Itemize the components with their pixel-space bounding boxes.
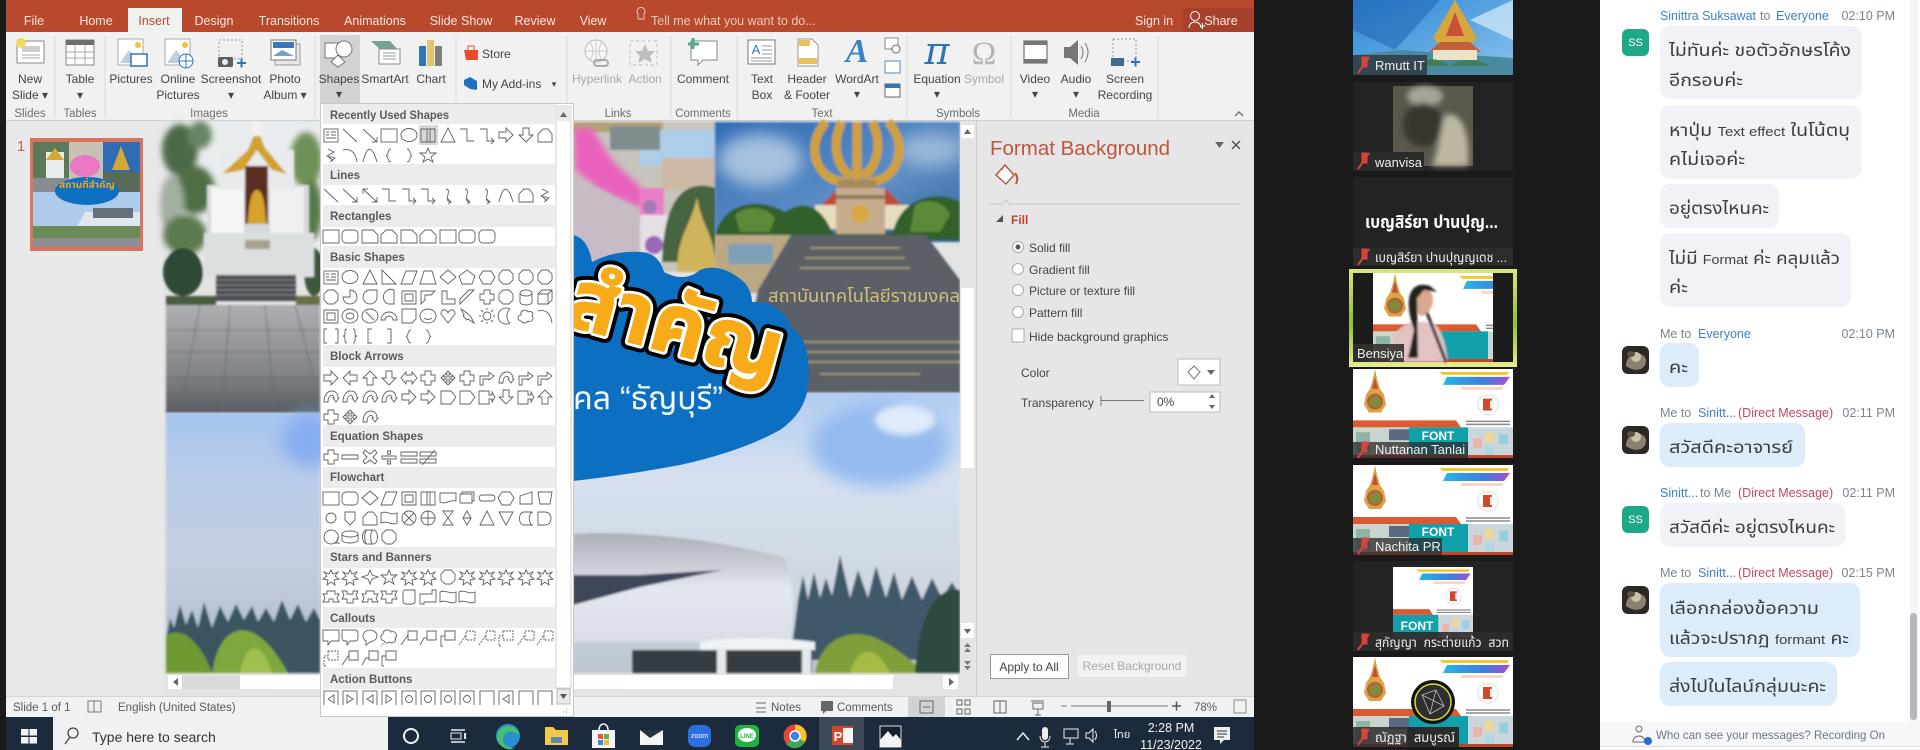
ribbon: Symbols group: Symbols [936,108,980,120]
message group: Sinittra to Everyone 02:10 [1622,9,1895,307]
message group: Me to Sinitt 02:15: 02:15 PM [1841,566,1895,580]
ribbon: Text group: Text [811,108,833,120]
ribbon: Text group [748,33,900,120]
message group: Me to Sinitt 02:11: (Direct Message) [1738,406,1833,420]
bubble [1660,583,1860,657]
section headers: Stars and Banners [330,552,432,564]
panel: Format Background pane: Fill [1011,213,1028,227]
ribbon: Links group: Action [628,72,662,86]
title badge: blue cloud with heading: สำคัญ [557,251,794,398]
title bar with ribbon tabs: File [24,14,44,28]
fill options: Hide background graphics [1029,330,1168,344]
section headers: Equation Shapes [330,431,423,443]
fill options: Pattern fill [1029,306,1082,320]
Windows taskbar [6,717,1254,750]
tile: Nachita PR [1353,465,1513,555]
section headers: Rectangles [330,211,391,223]
message group: Sinitt to Me 02:11: SS [1628,514,1643,526]
ribbon: Links group [572,40,662,120]
ribbon: Media group: Recording [1098,88,1152,102]
ribbon: Media group: Media [1068,108,1100,120]
status bar: Comments [837,702,893,714]
title bar with ribbon tabs: Design [195,14,233,28]
taskbar app icons [404,717,901,750]
status bar: Slide 1 of 1 [13,702,71,714]
photo: shrine [160,121,324,413]
action buttons [324,691,552,707]
fill options: Gradient fill [1029,263,1090,277]
message group: Me to Sinitt 02:15: (Direct Message) [1738,566,1833,580]
slide horizontal scrollbar [168,675,958,689]
tile: Nuttanan Tanlai [1353,369,1513,458]
bubble [1660,662,1837,706]
section headers: Block Arrows [330,351,404,363]
tile: name placeholder: เบญสิร์ยา ปานปุญ... [1365,212,1498,233]
color and transparency controls: 0% [1157,395,1175,409]
ribbon: Links group: Hyperlink [572,72,623,86]
color and transparency controls: Color [1021,366,1050,380]
title badge: blue cloud with heading: สำคัญ [557,251,794,398]
bubble: หาปุ่ม Text effect ในโน้ตบุ [1669,120,1850,141]
title bar with ribbon tabs: Share [1204,14,1238,28]
tile: third poster participant [1350,561,1513,651]
title bar with ribbon tabs [6,0,1254,32]
title bar with ribbon tabs: View [580,14,607,28]
ribbon: Slides and Tables groups: ▾ [77,88,83,102]
message group: Me to Sinitt 02:11 [1622,406,1895,467]
tile: Bensiya active speaker [1349,269,1533,367]
section headers: Callouts [330,613,375,625]
title bar with ribbon tabs: Slide Show [430,14,493,28]
ribbon: Media group: ▾ [1073,87,1079,101]
message group: Sinittra to Everyone 02:10: 02:10 PM [1841,9,1895,23]
slide vertical scrollbar [960,122,976,697]
bubble: แล้วจะปรากฏ formant คะ [1669,628,1849,648]
bubble [1660,423,1805,467]
search box [53,717,388,750]
bubble: ไม่ทันค่ะ ขอตัวอักษรโค้ง [1668,40,1851,60]
tile: wanvisa: wanvisa [1374,155,1423,170]
ribbon: Media group: ▾ [1032,87,1038,101]
ribbon: Text group: Header [787,72,827,86]
ribbon: Images group: Pictures [109,72,153,86]
ribbon: Text group: A [844,33,868,70]
ribbon: Media group: Audio [1061,72,1092,86]
bubble [1660,26,1862,99]
section headers: Recently Used Shapes [330,110,449,122]
bubble [1660,233,1851,307]
ribbon: Images group: Images [190,108,228,120]
color and transparency controls [1021,359,1220,412]
ribbon: Images group: Online [161,72,196,86]
stars and banners [323,570,553,604]
equation shapes [324,450,436,465]
message group: Me to Sinitt 02:11: Sinitt... [1698,406,1736,420]
section headers: Lines [330,170,360,182]
status bar: 78% [1194,702,1217,714]
title bar with ribbon tabs: Insert [138,14,170,28]
panel: Format Background pane [976,121,1254,697]
message group: Sinitt to Me 02:11: Sinitt... [1660,486,1698,500]
tile: Rmutt IT [1353,0,1513,75]
tile: Nuttanan Tanlai: FONT [1422,429,1455,443]
ribbon: Images group: Pictures [156,88,200,102]
ribbon: Add-ins group: ▾ [552,79,557,89]
bubble: คะ [1669,358,1688,377]
ribbon: Media group: Screen [1106,72,1144,86]
ribbon: Slides and Tables groups: Slides [14,108,46,120]
title badge: blue cloud with heading: คล “ธัญบุรี” [573,380,723,417]
title bar with ribbon tabs: Transitions [259,14,319,28]
ribbon: Text group: Box [752,88,772,102]
ribbon: Images group: Album ▾ [263,88,307,102]
title bar with ribbon tabs: Home [79,14,113,28]
photo: monument with gold crown [715,122,962,393]
chat footer notice [1600,722,1920,747]
tile: Bensiya active speaker: Bensiya [1357,346,1404,361]
message group: Sinittra to Everyone 02:10: Sinittra Suksawat [1660,9,1757,23]
recently used shapes [324,128,552,162]
ribbon: Illustrations group: SmartArt [361,72,409,86]
ribbon: Illustrations group: Chart [416,72,446,86]
message group: Sinittra to Everyone 02:10: to [1760,9,1770,23]
bubble: สวัสดีค่ะ อยู่ตรงไหนคะ [1669,518,1835,539]
ribbon: Slides and Tables groups: Slide ▾ [12,88,48,102]
ribbon: Text group: WordArt [835,72,880,86]
ribbon: Slides and Tables groups: Table [66,72,95,86]
monument inscription: สถาบันเทคโนโลยีราชมงคล [768,286,960,306]
ribbon: Symbols group [913,29,1004,120]
ribbon: Slides and Tables groups: New [18,72,42,86]
shape icons [323,128,553,707]
taskbar app icons: LINE [740,734,754,740]
slide thumbnail [30,138,143,251]
ribbon: Text group: A [752,42,761,57]
ribbon: Slides and Tables groups: Tables [63,108,97,120]
ribbon: Images group: ▾ [228,88,234,102]
fill options: Picture or texture fill [1029,284,1135,298]
rectangles [323,230,495,243]
title bar with ribbon tabs: Animations [344,14,406,28]
ribbon: Comments group: Comment [677,72,730,86]
icon: paint bucket [996,165,1017,184]
callouts [323,630,553,666]
avatar SS: SS [1628,37,1643,49]
bubble: สวัสดีคะอาจารย์ [1669,438,1793,457]
bubble: อีกรอบค่ะ [1669,71,1743,90]
status bar: English (United States) [118,702,236,714]
ribbon: Images group: Screenshot [201,72,262,86]
pane buttons [990,654,1186,678]
system tray: 2:28 PM [1148,721,1194,735]
bubble: ค่ะ [1669,278,1688,297]
pane buttons: Apply to All [999,660,1059,674]
ribbon: Add-ins group [464,46,557,91]
lines [324,189,549,204]
tile: Rmutt IT: Rmutt IT [1375,58,1425,73]
slide editing canvas collage [160,121,976,697]
system tray: ไทย [1113,729,1130,741]
ribbon: Comments group: Comments [675,108,731,120]
tile: Nuttanan Tanlai: Nuttanan Tanlai [1375,442,1465,457]
chat scrollbar thumb [1910,613,1917,720]
panel: slide thumbnail pane: 1 [17,138,25,155]
message group: Sinitt to Me 02:11: to Me [1700,486,1731,500]
title badge: blue cloud with heading: สำคัญ [557,251,794,398]
ribbon: Illustrations group: Shapes [319,72,359,86]
message group: Sinitt to Me 02:11: 02:11 PM [1842,486,1895,500]
tile: Nachita PR: Nachita PR [1375,539,1441,554]
fill options [1012,241,1168,344]
tile: network avatar participant [1353,657,1513,747]
bubble: ส่งไปในไลน์กลุ่มนะคะ [1669,677,1826,697]
ribbon: Media group [1020,39,1243,120]
section headers: Basic Shapes [330,252,405,264]
bubble: คไม่เจอค่ะ [1669,150,1745,169]
color and transparency controls: Transparency [1021,396,1094,410]
tile: Nachita PR: FONT [1422,525,1455,539]
ribbon: Slides and Tables groups [12,38,97,120]
tile: name placeholder [1353,177,1513,266]
photo: pink decoration and building [573,122,716,272]
pane buttons: Reset Background [1083,659,1181,673]
ribbon: Images group [109,39,307,120]
section headers: Flowchart [330,472,384,484]
message group: Me to Sinitt 02:11: 02:11 PM [1842,406,1895,420]
taskbar app icons: zoom [691,733,708,740]
bubble: อยู่ตรงไหนคะ [1669,199,1769,220]
ribbon: Comments group [675,38,731,120]
title bar with ribbon tabs: Review [514,14,556,28]
basic shapes [324,270,552,343]
block arrows [324,371,552,424]
message group: Me to Sinitt 02:15: Sinitt... [1698,566,1736,580]
title bar with ribbon tabs: Tell me what you want to do... [651,14,816,28]
tile: name placeholder: เบญสิร์ยา ปานปุญญเดช ... [1375,250,1507,265]
Shapes dropdown gallery [320,104,574,716]
bubble [1660,503,1845,547]
bubble [1660,105,1861,179]
tile: third poster participant: FONT [1401,619,1434,633]
icon: windows start [21,729,37,744]
dropdown scrollbar [556,106,571,712]
ribbon: Add-ins group: My Add-ins [482,77,541,91]
ribbon: Symbols group: Symbol [964,72,1004,86]
avatar SS [1622,29,1649,56]
tile: network avatar participant: ณัฏฐา สมบูรณ์ [1375,730,1455,745]
message group: Me to Sinitt 02:15: Me to [1660,566,1691,580]
ribbon: Text group: Text [751,72,774,86]
chat footer notice: Who can see your messages? Recording On [1656,728,1885,742]
message group: Sinitt to Me 02:11: (Direct Message) [1738,486,1833,500]
ribbon: Images group: Photo [269,72,301,86]
ribbon: Symbols group: Ω [972,36,996,72]
panel: participant video gallery [1349,0,1533,747]
title bar with ribbon tabs: Sign in [1135,14,1173,28]
tile: wanvisa [1353,82,1513,171]
taskbar app icons: P [834,729,843,744]
tile: third poster participant: สุกัญญา กระต่ายแก้ว สวท [1375,635,1509,650]
bubble: ไม่มี Format ค่ะ คลุมแล้ว [1668,248,1840,269]
bubble [1660,184,1779,228]
section headers: Action Buttons [330,674,412,686]
status bar: Notes [771,702,801,714]
ribbon: Media group: Video [1020,72,1051,86]
title badge: blue cloud with heading [557,235,809,481]
message group: Me to Everyone 02:10 [1622,327,1895,387]
ribbon: Text group: & Footer [784,88,830,102]
ribbon: Symbols group: Equation [913,72,961,86]
photo: white dome building under sky [573,393,960,673]
ribbon: Links group: Links [605,108,632,120]
ribbon [6,29,1254,121]
fill options: Solid fill [1029,241,1070,255]
panel: chat [1600,0,1920,750]
message group: Me to Everyone 02:10: Me to [1660,327,1691,341]
message group: Me to Everyone 02:10: 02:10 PM [1841,327,1895,341]
bubble: เลือกกล่องข้อความ [1669,598,1819,618]
flowchart [323,491,552,544]
message group: Sinitt to Me 02:11 [1622,486,1895,547]
message group: Me to Everyone 02:10: Everyone [1698,327,1751,341]
message group: Me to Sinitt 02:15 [1622,566,1895,706]
message group: Me to Sinitt 02:11: Me to [1660,406,1691,420]
section headers [323,104,555,689]
ribbon: Symbols group: π [924,29,951,73]
panel: Format Background pane: Format Background [990,137,1170,160]
panel: PowerPoint window [6,0,1254,717]
system tray [1017,721,1230,750]
ribbon: Symbols group: ▾ [934,87,940,101]
photo: sky with trees left [166,413,338,673]
ribbon: Add-ins group: Store [482,47,511,61]
message group: Sinittra to Everyone 02:10: Everyone [1776,9,1829,23]
ribbon: Text group: ▾ [854,87,860,101]
ribbon: Illustrations group [319,35,446,103]
status bar [6,696,1254,717]
panel: slide thumbnail pane [6,121,163,697]
bubble [1660,343,1699,387]
slide thumbnail: สถานที่สำคัญ [59,177,115,191]
ribbon: Illustrations group: ▾ [336,87,342,101]
search box: Type here to search [92,729,216,745]
